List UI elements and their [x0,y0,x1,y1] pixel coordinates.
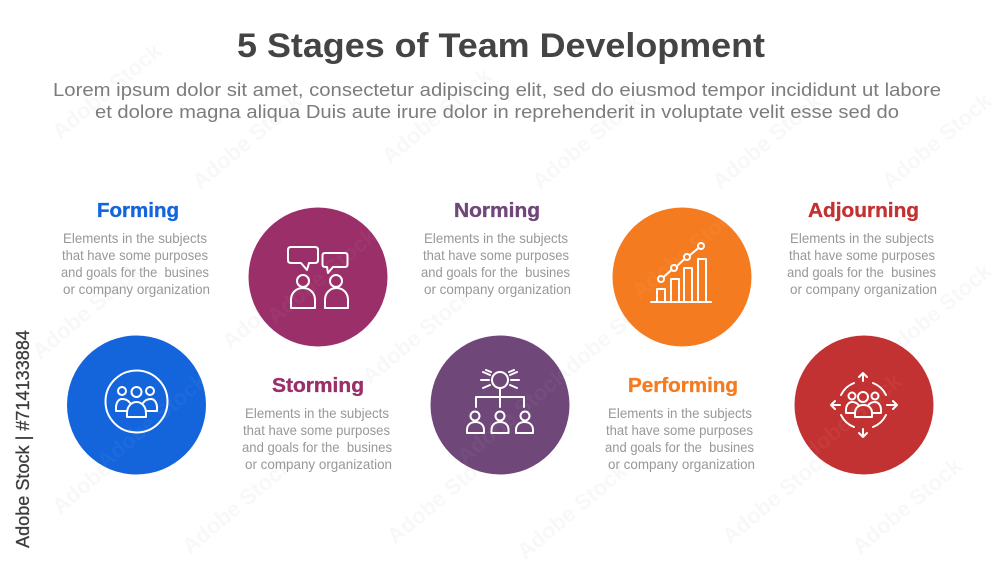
text: Adobe Stock [382,443,502,549]
description: adjourning: Elements in the subjects [790,230,934,246]
heading: norming: Norming [454,200,540,222]
icon: two people talking [288,247,348,308]
stage 4: performing text [605,375,755,472]
description: performing [605,405,755,472]
text: Adobe Stock [92,368,212,474]
text: Adobe Stock [512,458,632,563]
text: Adobe Stock [787,368,907,474]
description: storming: or company organization [245,456,392,472]
stage 4: performing circle [612,208,752,346]
stage 1: forming text [61,200,210,297]
text: Adobe Stock [187,88,307,194]
description: norming: that have some purposes [423,247,569,263]
stage 5: adjourning circle [794,336,934,474]
description: forming [61,230,210,297]
description: storming: and goals for the busines [242,439,392,455]
heading: forming: Forming [97,200,179,222]
text: Adobe Stock [27,258,147,364]
subtitle [53,79,941,122]
text: Adobe Stock [877,88,997,194]
description: performing: and goals for the busines [605,439,754,455]
description: performing: or company organization [608,456,755,472]
text: Adobe Stock [547,283,667,389]
text: Adobe Stock [452,363,572,469]
stage 2: storming text [242,375,392,472]
text: Adobe Stock [262,223,382,329]
description: adjourning: and goals for the busines [787,264,936,280]
text: Adobe Stock [627,198,747,304]
description: forming: or company organization [63,281,210,297]
description: performing: that have some purposes [606,422,753,438]
description: forming: Elements in the subjects [63,230,207,246]
icon: hierarchy with idea [467,370,533,433]
stage 5: adjourning text [787,200,937,297]
description: forming: that have some purposes [62,247,208,263]
description: storming [242,405,392,472]
description: norming [421,230,571,297]
description: norming: or company organization [424,281,571,297]
text: Adobe Stock [527,88,647,194]
text: Adobe Stock [357,283,477,389]
stage 3: norming text [421,200,571,297]
text: Adobe Stock [377,63,497,169]
stage 2: storming circle [248,208,388,346]
description: norming: and goals for the busines [421,264,570,280]
description: forming: and goals for the busines [61,264,209,280]
description: performing: Elements in the subjects [608,405,752,421]
description: norming: Elements in the subjects [424,230,568,246]
icon: team with outward arrows [831,373,897,437]
heading: storming: Storming [272,375,364,397]
heading: adjourning: Adjourning [808,200,919,222]
text: Adobe Stock [47,413,167,519]
description: storming: that have some purposes [243,422,390,438]
text: Adobe Stock [847,453,967,559]
text: Adobe Stock [717,443,837,549]
text: Adobe Stock [707,88,827,194]
subtitle: Lorem ipsum dolor sit amet, consectetur adipiscing elit, sed do eiusmod tempor incididunt ut labore [53,79,941,100]
stage 1: forming circle [67,336,206,474]
subtitle: et dolore magna aliqua Duis aute irure dolor in reprehenderit in voluptate velit esse sed do [95,101,899,122]
text: Adobe Stock [47,38,167,144]
icon: growth bar chart [651,243,711,302]
title: 5 Stages of Team Development [237,27,765,65]
description: adjourning: or company organization [790,281,937,297]
icon: team in circle [106,370,168,432]
description: storming: Elements in the subjects [245,405,389,421]
side credit: Adobe Stock | #714133884 [13,330,33,548]
text: Adobe Stock [217,248,337,354]
text: Adobe Stock [877,258,997,364]
description: adjourning: that have some purposes [789,247,935,263]
description: adjourning [787,230,937,297]
stage 3: norming circle [430,336,570,474]
heading: performing: Performing [628,375,738,397]
text: Adobe Stock [177,453,297,559]
